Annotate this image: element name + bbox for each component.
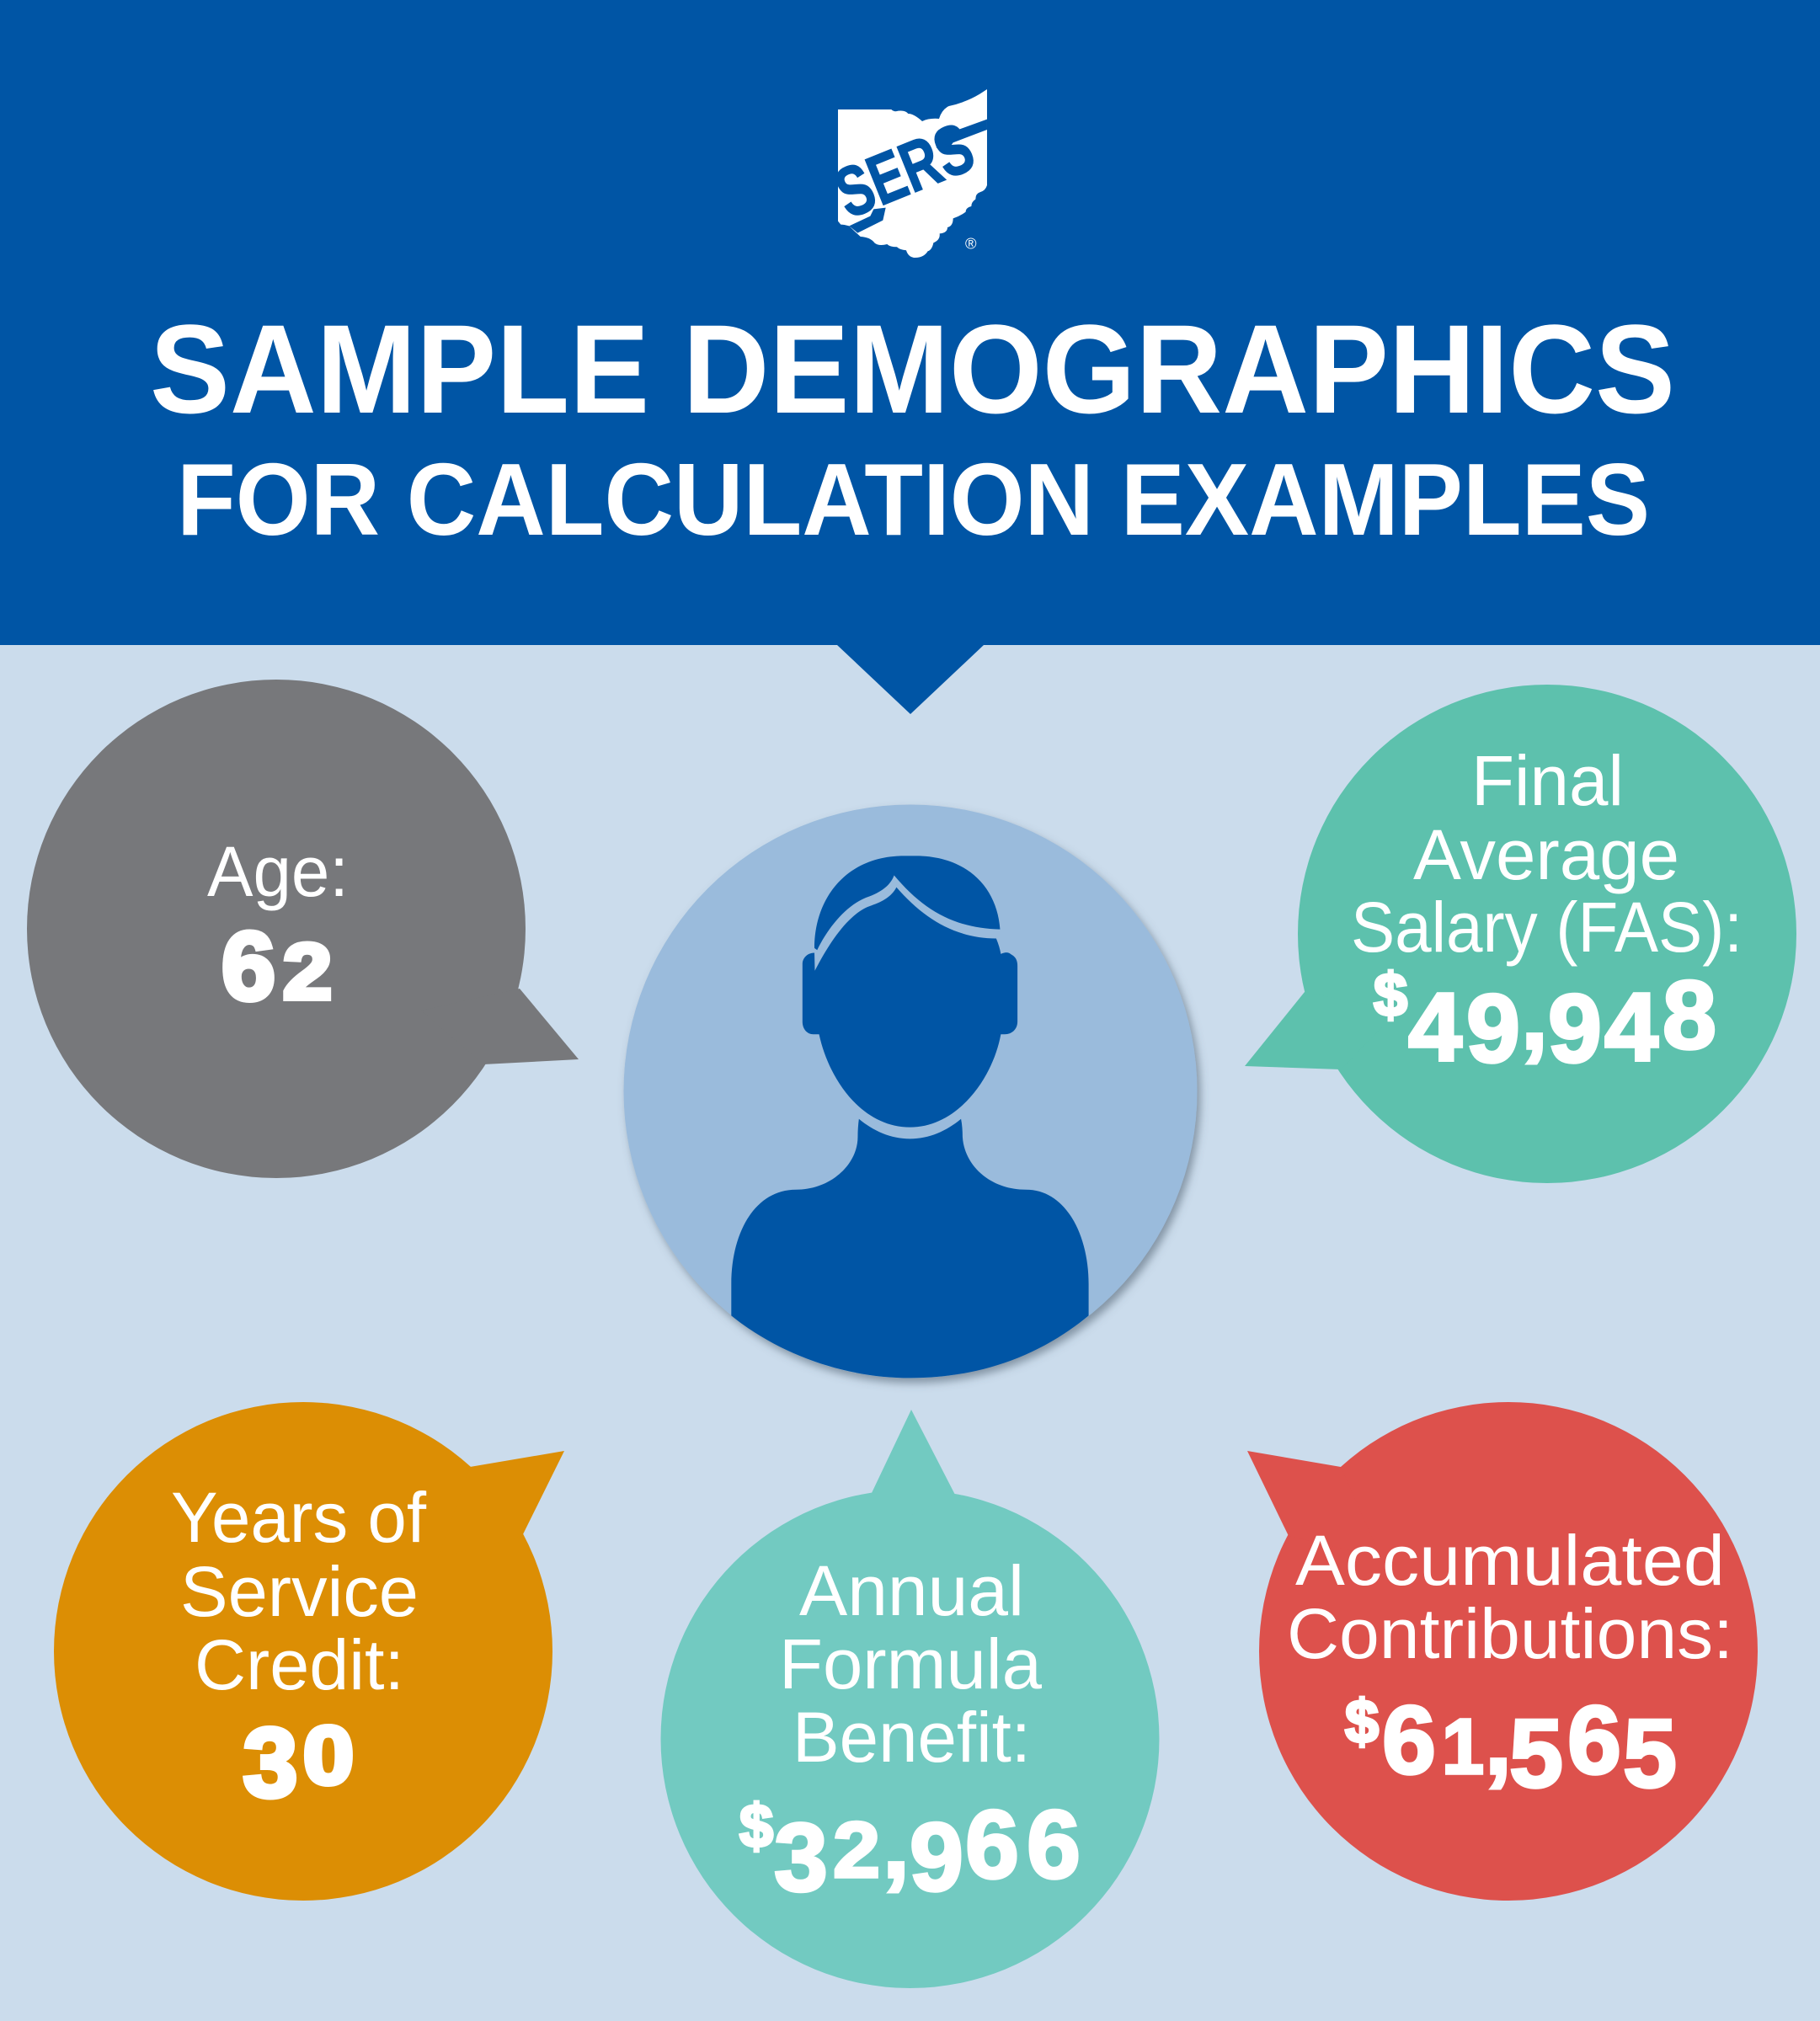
bubble: annual formula benefit: ,	[883, 1790, 910, 1898]
header banner	[0, 0, 1820, 714]
bubble: annual formula benefit: 9	[910, 1804, 963, 1912]
bubble: final average salary: Salary (FAS):	[1351, 888, 1743, 967]
title: SAMPLE DEMOGRAPHICS	[150, 298, 1675, 440]
bubble: accumulated contributions: $	[1345, 1688, 1379, 1756]
person avatar	[623, 805, 1198, 1378]
title: FOR CALCULATION EXAMPLES	[177, 442, 1650, 557]
bubble: final average salary: Average	[1413, 815, 1679, 894]
bubble: annual formula benefit: 6	[965, 1791, 1019, 1899]
bubble: final average salary: 9	[1466, 975, 1520, 1083]
bubble: annual formula benefit: 2	[833, 1805, 880, 1894]
bubble: years of service credit: Credit:	[195, 1625, 404, 1704]
bubble: annual formula benefit: Benefit:	[793, 1698, 1031, 1777]
logo: SERS Ohio mark: ®	[965, 235, 977, 253]
bubble: accumulated contributions: 1	[1442, 1703, 1484, 1790]
bubble: final average salary	[1245, 685, 1796, 1183]
bubble: age: Age:	[207, 832, 349, 911]
bubble: years of service credit	[54, 1402, 564, 1901]
bubble: annual formula benefit: 3	[774, 1804, 828, 1912]
bubble: age	[27, 680, 579, 1178]
bubble: accumulated contributions	[1247, 1402, 1758, 1901]
bubble: accumulated contributions: 6	[1567, 1687, 1621, 1794]
bubble: final average salary: 9	[1548, 975, 1602, 1083]
bubble: age: 6	[221, 913, 275, 1021]
bubble: annual formula benefit: $	[739, 1793, 773, 1860]
bubble: years of service credit: 0	[303, 1709, 354, 1801]
bubble: final average salary: 4	[1604, 973, 1658, 1081]
bubble: years of service credit: Service	[180, 1552, 419, 1631]
bubble: annual formula benefit: Annual	[799, 1551, 1024, 1630]
bubble: final average salary: $	[1374, 962, 1407, 1029]
bubble: accumulated contributions: Accumulated	[1295, 1521, 1725, 1600]
bubble: annual formula benefit: 6	[1027, 1791, 1081, 1899]
bubble: accumulated contributions: Contributions:	[1287, 1594, 1733, 1673]
bubble: accumulated contributions: 5	[1623, 1700, 1677, 1808]
bubble: annual formula benefit: Formula	[779, 1624, 1042, 1704]
bubble: accumulated contributions: 5	[1509, 1700, 1563, 1808]
title	[150, 298, 1675, 557]
bubble: years of service credit: 3	[243, 1708, 297, 1817]
bubble: final average salary: 8	[1663, 962, 1716, 1069]
bubble: age: 2	[283, 927, 332, 1016]
bubble: accumulated contributions: 6	[1382, 1687, 1436, 1794]
logo: SERS Ohio mark: SERS	[825, 108, 985, 233]
logo: SERS Ohio mark	[825, 89, 987, 258]
bubble: final average salary: 4	[1408, 973, 1462, 1081]
bubble: final average salary: Final	[1471, 741, 1624, 820]
bubble: years of service credit: Years of	[171, 1478, 427, 1557]
bubble: annual formula benefit	[660, 1410, 1159, 1988]
bubble: final average salary: ,	[1521, 962, 1548, 1069]
bubble: accumulated contributions: ,	[1485, 1687, 1512, 1794]
